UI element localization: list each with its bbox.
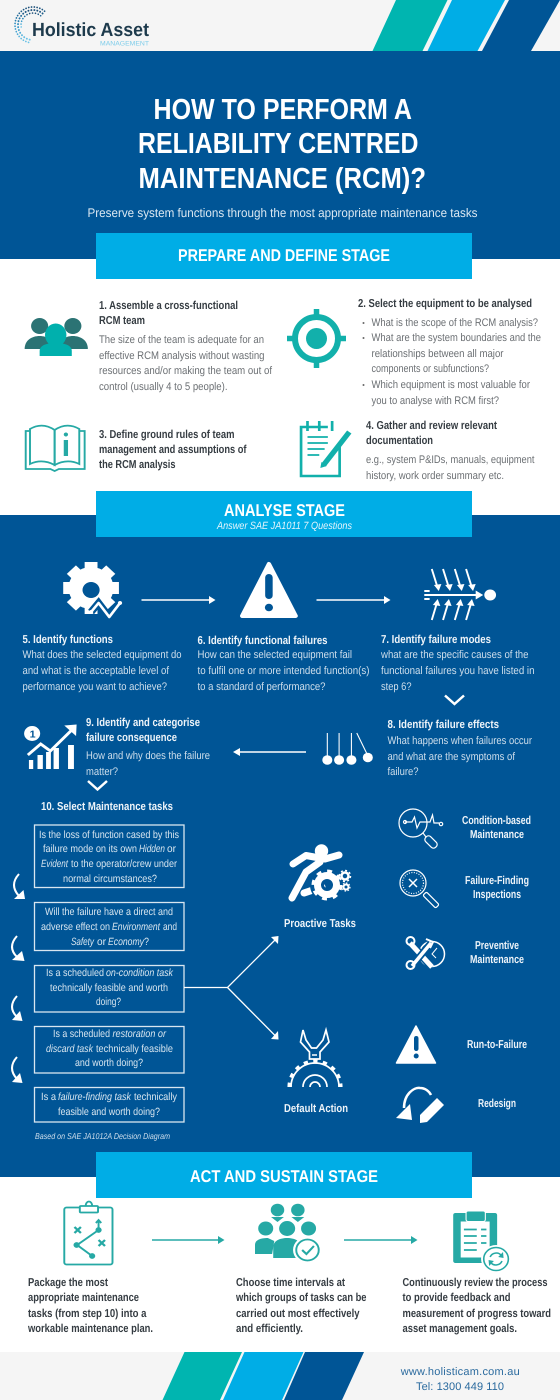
heading: 5. Identify functions [22,634,113,646]
banner: prepare and define stage: PREPARE AND DEFINE STAGE [178,246,390,265]
label: Default Action [284,1103,348,1115]
icon: notepad and pen [301,421,349,476]
body text: failure? [388,766,418,778]
body text: to provide feedback and [402,1292,510,1304]
heading: 1. Assemble a cross-functional [99,300,238,312]
question box 3: technically feasible and worth [50,982,168,994]
question box 2: adverse effect on [41,921,110,933]
label: Run-to-Failure [467,1039,527,1051]
icon: gear with trend line [63,562,122,617]
condition-based maintenance [399,809,531,849]
arrow: step 6 to step 7 [316,596,390,604]
body text: workable maintenance plan. [27,1323,153,1335]
title: HOW TO PERFORM A [154,94,412,126]
question box 4: restoration or [112,1028,166,1040]
label: Proactive Tasks [284,918,356,930]
heading [366,420,497,447]
question box 1: failure mode on its own [43,843,137,855]
body text: and efficiently. [236,1323,303,1335]
question box 5 [34,1088,184,1122]
chevron: step 7 to step 8 [445,696,464,704]
icon: undo arrow and pencil [396,1088,444,1123]
title: RELIABILITY CENTRED [138,128,418,160]
logo: Holistic Asset Management: MANAGEMENT [100,40,149,48]
question box 5: feasible and worth doing? [58,1106,160,1118]
body text: appropriate maintenance [28,1292,139,1304]
heading: 3. Define ground rules of team [99,429,234,441]
question box 4: Is a scheduled [53,1028,110,1040]
footnote: Based on SAE JA1012A Decision Diagram [35,1131,170,1141]
step 9: categorise failure consequence [24,717,210,778]
body text: What happens when failures occur [388,735,532,747]
arrow: act step 1 to step 2 [152,1236,224,1244]
icon: tools and clock [406,937,444,969]
failure-finding inspections [400,870,529,908]
label: Failure-Finding [465,875,529,887]
contact details: Tel: 1300 449 110 [416,1381,504,1393]
logo: Holistic Asset Management [15,7,150,47]
question box 2: Safety [71,936,95,948]
step 3: ground rules [26,426,247,471]
heading: 8. Identify failure effects [388,719,499,731]
question box 1: Evident [41,858,69,870]
banner: act and sustain stage [96,1152,472,1198]
icon: target [287,309,346,368]
body text [380,649,534,693]
footer [0,1352,560,1400]
proactive tasks [284,844,356,930]
step 4: documentation [301,420,534,482]
body text: carried out most effectively [236,1308,360,1320]
banner: analyse stage [96,491,472,537]
body text: to fulfil one or more intended function(s) [198,665,370,677]
icon: fishbone diagram [424,569,496,620]
question box 4: discard task [46,1043,94,1055]
body text [366,454,534,482]
question box 1: or [167,843,176,855]
body text [22,649,182,693]
body text: and what are the symptoms of [388,751,516,763]
question box 5: Is a [41,1091,56,1103]
question box 2: Will the failure have a direct and [45,906,173,918]
subtitle: Preserve system functions through the most appropriate maintenance tasks [88,206,478,220]
body text: tasks (from step 10) into a [28,1308,147,1320]
body text [99,334,273,393]
heading: management and assumptions of [99,444,247,456]
question box 5: technically [134,1091,178,1103]
step 1: assemble team [25,300,273,393]
title: MAINTENANCE (RCM)? [138,163,426,195]
body text: history, work order summary etc. [366,470,504,482]
heading: 10. Select Maintenance tasks [41,801,173,813]
curved arrows between questions [12,874,25,1083]
step 5: identify functions [22,562,182,693]
question box 2: ? [144,936,149,948]
icon: clipboard plan [64,1202,112,1264]
arrow: step 8 to step 9 [233,748,306,756]
body text: resources and/or making the team out of [99,365,273,377]
icon: newton's cradle [322,733,373,765]
body text: What does the selected equipment do [22,649,182,661]
run-to-failure [396,1026,527,1063]
question box 4 [34,1026,184,1073]
body text [402,1277,551,1335]
label: Preventive [475,940,519,952]
contact details [400,1366,520,1393]
title [138,94,426,195]
label [462,815,531,841]
label: Inspections [473,889,521,901]
label: Maintenance [470,829,524,841]
title panel [0,51,560,259]
step 10: select maintenance tasks [12,801,184,1141]
icon: team with check [255,1204,322,1264]
bullet list: relationships between all major [372,348,504,360]
body text: How and why does the failure [86,750,210,762]
heading [86,717,200,744]
body text: The size of the team is adequate for an [99,334,264,346]
body text: what are the specific causes of the [380,649,528,661]
label [470,940,524,966]
question box 3 [34,966,184,1012]
heading: the RCM analysis [99,459,176,471]
heading: 9. Identify and categorise [86,717,200,729]
question box 4: technically feasible [96,1043,173,1055]
header stripes [372,0,560,51]
icon: runner with gears [292,844,350,899]
question box 4: and worth doing? [75,1057,143,1069]
heading [99,300,238,327]
heading: RCM team [99,315,145,327]
question box 3: doing? [96,996,121,1008]
question box 2: Economy [108,936,145,948]
icon: team [25,318,88,356]
heading: 6. Identify functional failures [198,635,328,647]
question box 1 [34,825,184,888]
question box 1: to the operator/crew under [71,858,177,870]
step 8: identify failure effects [322,719,532,778]
label: Condition-based [462,815,531,827]
icon: warning triangle [396,1026,436,1063]
body text: e.g., system P&IDs, manuals, equipment [366,454,534,466]
preventive maintenance [406,937,524,969]
step 7: identify failure modes [380,569,534,693]
logo: Holistic Asset Management: Holistic Asset [32,20,150,41]
act step 1: package tasks [27,1202,153,1335]
body text: matter? [86,766,118,778]
bullet list: Which equipment is most valuable for [372,379,530,391]
heading: 4. Gather and review relevant [366,420,497,432]
arrow: act step 2 to step 3 [344,1236,418,1244]
banner: analyse stage: Answer SAE JA1011 7 Questions [216,520,353,532]
icon: magnifier with cross [400,870,439,908]
heading: 7. Identify failure modes [381,634,491,646]
icon: wrench and gear [290,1030,340,1087]
body text: which groups of tasks can be [235,1292,366,1304]
icon: warning triangle [242,564,296,616]
analyse stage background [0,515,560,1177]
body text: control (usually 4 to 5 people). [99,381,228,393]
question box 5: failure-finding task [58,1091,132,1103]
body text: effective RCM analysis without wasting [99,350,264,362]
label: Maintenance [470,954,524,966]
question box 1: Hidden [139,843,165,855]
bullet list: components or subfunctions? [372,363,489,375]
arrow: step 5 to step 6 [142,596,216,604]
label: Redesign [478,1098,516,1110]
branching arrows [184,936,278,1040]
contact details: www.holisticam.com.au [400,1366,520,1378]
question box 3: Is a scheduled [46,967,104,979]
header bar [0,0,560,51]
icon: checklist with refresh [453,1211,511,1273]
act step 3: continuous review [402,1211,551,1335]
body text [235,1277,366,1335]
body text: How can the selected equipment fail [198,649,352,661]
icon: rising bar chart: 1 [30,730,36,740]
body text [27,1277,153,1335]
heading: documentation [366,435,433,447]
body text: functional failures you have listed in [381,665,534,677]
question box 3: on-condition task [106,967,174,979]
body text: step 6? [381,681,412,693]
redesign [396,1088,516,1123]
chevron: step 9 to step 10 [88,781,107,790]
banner: prepare and define stage [96,233,472,279]
icon: book [26,426,85,471]
banner: analyse stage: ANALYSE STAGE [224,501,345,520]
question box 1: normal circumstances? [63,873,157,885]
icon: magnifier with pulse [399,809,443,849]
icon: rising bar chart [24,724,77,769]
act step 2: choose intervals [235,1204,366,1335]
bullet list [362,317,541,407]
body text: to a standard of performance? [198,681,326,693]
banner: act and sustain stage: ACT AND SUSTAIN STAGE [190,1167,378,1186]
question box 2: and [163,921,177,933]
body text: asset management goals. [402,1323,517,1335]
bullet list: you to analyse with RCM first? [372,395,499,407]
question box 2: Environment [112,921,161,933]
question box 2: or [97,936,106,948]
step 2: select equipment [287,298,541,407]
body text: performance you want to achieve? [22,681,167,693]
heading [99,429,247,471]
body text [388,735,532,778]
question box 2 [34,902,184,950]
question box 1: Is the loss of function cased by this [39,829,179,841]
label [465,875,529,901]
body text: Package the most [28,1277,108,1289]
body text [86,750,210,778]
step 6: identify functional failures [198,564,370,693]
body text [198,649,370,693]
default action [284,1030,348,1115]
body text: and what is the acceptable level of [22,665,170,677]
body text: Choose time intervals at [236,1277,345,1289]
heading: failure consequence [86,732,177,744]
footer stripes [162,1352,364,1400]
